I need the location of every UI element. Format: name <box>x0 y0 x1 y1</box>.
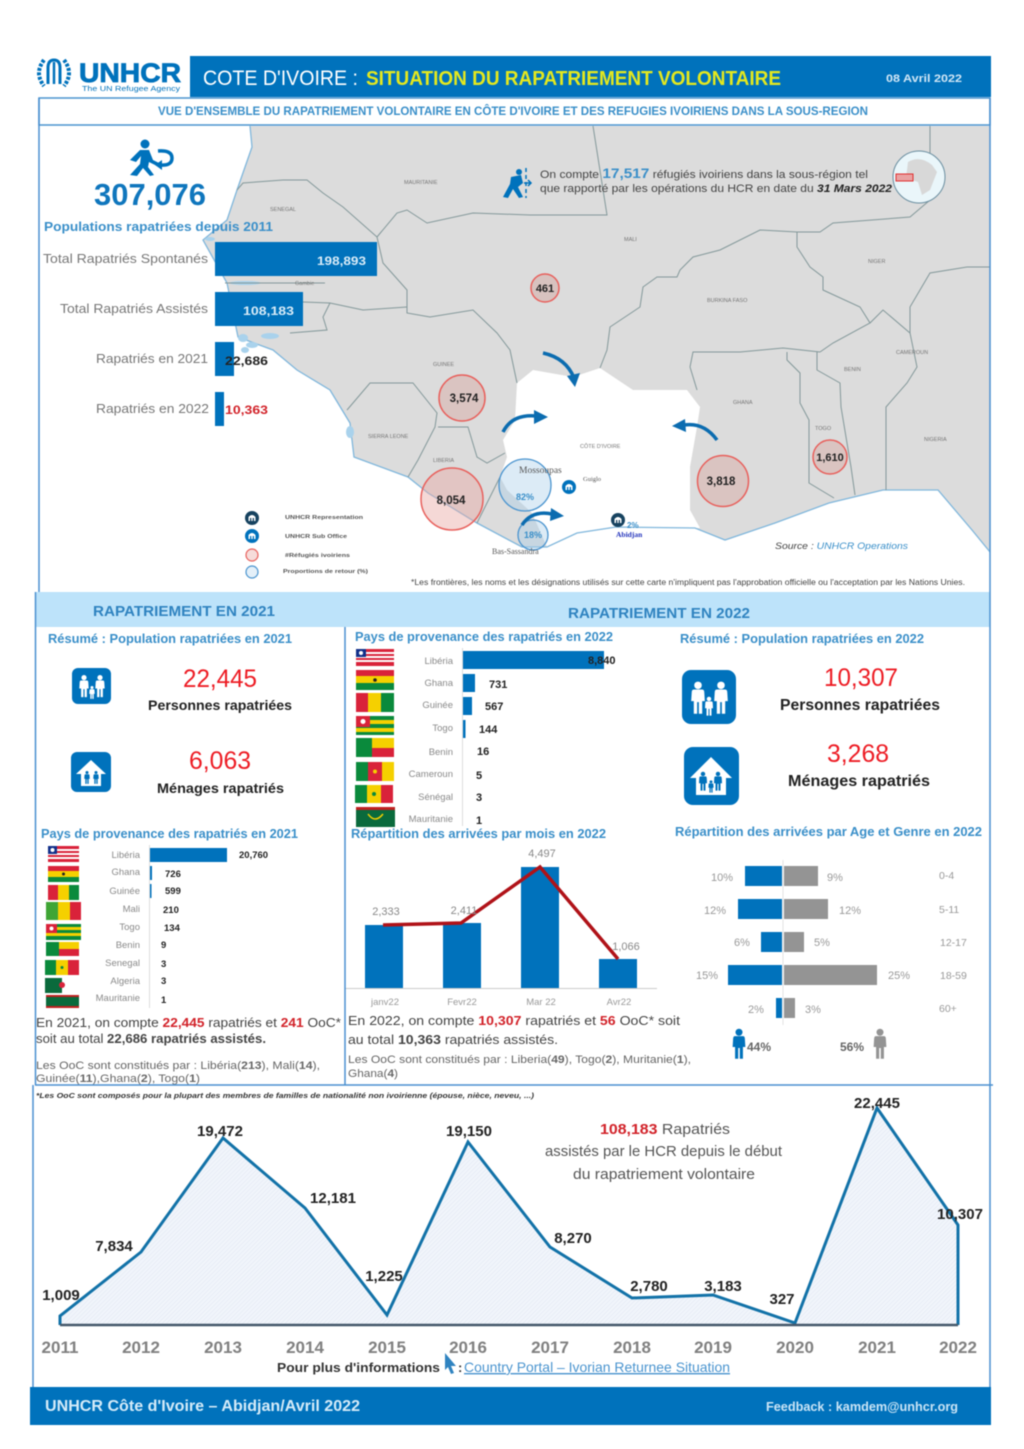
chart: population pyramid: 60+ <box>939 1003 957 1015</box>
heading: 2021: RAPATRIEMENT EN 2021 <box>93 603 275 620</box>
heading: Pays de provenance des rapatriés en 2022 <box>355 630 613 644</box>
chart: population pyramid: 12% <box>704 905 726 917</box>
icon: cursor <box>445 1353 456 1374</box>
text block: summary 2021 <box>36 1015 341 1085</box>
point labels: 19,150 <box>446 1123 492 1140</box>
footer <box>30 1387 991 1425</box>
area and line <box>60 1108 958 1325</box>
icon: locator globe <box>893 151 945 203</box>
panel: summary 2022 <box>680 632 940 805</box>
bar: 2021: 22,686 <box>225 354 268 368</box>
disclaimer: *Les frontières, les noms et les désignations utilisés sur cette carte n'impliquent pas l'approbation officielle ou l'acceptation par les Nations Unies. <box>411 578 965 587</box>
header banner <box>190 56 991 97</box>
flag: Senegal <box>45 960 79 975</box>
more information link: Country Portal – Ivorian Returnee Situation <box>464 1359 730 1375</box>
circle: Ghana 3,818 <box>698 456 748 506</box>
marker: Abidjan representation <box>611 513 625 527</box>
bar chart: 20,760 <box>239 850 268 861</box>
land <box>203 126 990 552</box>
country labels: NIGER <box>868 259 885 265</box>
chart: population pyramid: 5-11 <box>939 904 959 916</box>
logo: UNHCR <box>39 58 181 93</box>
panel: age and gender <box>675 825 982 1059</box>
circle: Mali 461: 461 <box>536 283 554 295</box>
icon: family <box>682 670 736 724</box>
more information link <box>277 1353 730 1375</box>
point labels: 19,472 <box>197 1123 243 1140</box>
point labels: 2,780 <box>630 1278 668 1295</box>
section band <box>36 592 990 627</box>
text block: summary 2021: En 2021, on compte 22,445 rapatriés et 241 OoC* <box>36 1015 341 1030</box>
legend <box>245 511 368 578</box>
country labels: CAMEROUN <box>896 350 928 356</box>
bar chart: 3 <box>161 976 166 987</box>
year axis: 2022 <box>939 1338 977 1357</box>
chart: bars and line: 2,411 <box>451 905 477 917</box>
flag: Togo <box>46 924 81 940</box>
point labels: 10,307 <box>937 1206 983 1223</box>
point labels: 1,225 <box>365 1268 403 1285</box>
bar chart: Algeria <box>110 976 141 987</box>
legend: UNHCR Sub Office <box>285 534 347 540</box>
chart: population pyramid: 3% <box>805 1004 821 1016</box>
icon: UNHCR emblem <box>39 60 69 86</box>
year axis: 2011 <box>42 1338 78 1357</box>
year axis: 2020 <box>776 1338 814 1357</box>
circle: Mali 461 <box>531 274 559 302</box>
icon: person returning <box>130 140 172 176</box>
chart: bars and line: 1,066 <box>612 941 640 953</box>
callout: refugees in the sub-region: On compte 17,517 réfugiés ivoiriens dans la sous-région tel <box>540 165 868 181</box>
heading: Résumé : Population rapatriées en 2022 <box>680 632 924 646</box>
chart: population pyramid: 25% <box>888 970 910 982</box>
text block: summary 2022: En 2022, on compte 10,307 rapatriés et 56 OoC* soit <box>348 1013 680 1028</box>
country labels: MAURITANIE <box>404 180 438 186</box>
chart: population pyramid: 0-4 <box>939 870 954 882</box>
year axis: 2016 <box>449 1338 487 1357</box>
chart: population pyramid: 5% <box>814 937 830 949</box>
total figure: 307,076 <box>94 177 206 212</box>
chart: bars and line: Avr22 <box>607 997 631 1008</box>
coastal inlets <box>205 237 354 438</box>
heading: Pays de provenance des rapatriés en 2021 <box>41 827 298 841</box>
stat: persons: Personnes rapatriées <box>780 697 940 714</box>
stat: persons: 22,445 <box>183 665 257 693</box>
chart: population pyramid: 15% <box>696 970 718 982</box>
text block: summary 2021: Les OoC sont constitués par : Libéria( 213), Mali( 14), <box>36 1060 320 1072</box>
bar chart: Mauritanie <box>409 814 453 825</box>
more information link: : <box>458 1360 462 1375</box>
stat: persons: 10,307 <box>824 664 898 692</box>
bar chart: 726 <box>165 869 181 880</box>
heading: Répartition des arrivées par Age et Genre en 2022 <box>675 825 982 839</box>
country labels: GUINEE <box>433 362 454 368</box>
bar chart: Togo <box>119 922 140 933</box>
Côte d'Ivoire <box>500 368 700 547</box>
flag: Mauritania <box>356 807 395 827</box>
point labels: 7,834 <box>95 1238 133 1255</box>
country labels: BURKINA FASO <box>707 298 748 304</box>
heading: 2022: RAPATRIEMENT EN 2022 <box>568 605 750 622</box>
bar: 2022 <box>96 392 268 426</box>
bar chart: Benin <box>429 747 453 758</box>
country labels: NIGERIA <box>924 437 947 443</box>
bar chart: Senegal <box>105 958 140 969</box>
place names: Guiglo <box>583 476 601 483</box>
place names: 2% <box>627 521 639 530</box>
place names: Mossoupas <box>519 466 562 476</box>
flag: Senegal <box>355 785 393 803</box>
bar chart: Ghana <box>111 867 141 878</box>
bar: spontanés: Total Rapatriés Spontanés <box>43 251 209 266</box>
point labels: 8,270 <box>554 1230 592 1247</box>
bar chart: Guinée <box>422 700 453 711</box>
chart: population pyramid: 2% <box>748 1004 764 1016</box>
callout: assisted returnees: assistés par le HCR depuis le début <box>545 1144 782 1160</box>
circle: Guinée 3,574: 3,574 <box>450 393 479 405</box>
country labels: SENEGAL <box>270 207 296 213</box>
icon: family <box>72 668 111 704</box>
bar: spontanés: 198,893 <box>317 254 366 268</box>
heading: Répartition des arrivées par mois en 2022 <box>351 827 606 841</box>
year axis: 2014 <box>286 1338 324 1357</box>
panel: origin countries 2022 <box>355 630 616 827</box>
place names: Abidjan <box>616 530 643 539</box>
place names <box>492 466 643 556</box>
bar chart: 144 <box>479 724 498 736</box>
callout: assisted returnees: 108,183 Rapatriés <box>600 1121 730 1138</box>
chart: bars and line: 2,333 <box>372 906 400 918</box>
bar chart: Benin <box>116 940 140 951</box>
country labels: CÔTE D'IVOIRE <box>580 443 621 450</box>
flag: Guinea <box>48 885 79 900</box>
flag: Mali <box>46 902 81 920</box>
wordmark: UNHCR <box>79 58 181 88</box>
overview strip: VUE D'ENSEMBLE DU RAPATRIEMENT VOLONTAIRE EN CÔTE D'IVOIRE ET DES REFUGIES IVOIRIENS DANS LA SOUS-REGION <box>158 105 868 118</box>
chart: population pyramid: 12-17 <box>940 937 967 949</box>
bar chart: Libéria <box>111 850 141 861</box>
stat: households: 6,063 <box>189 747 251 775</box>
bar: 2022: 10,363 <box>225 403 268 417</box>
bar chart: 134 <box>164 923 181 934</box>
bar: assistés: 108,183 <box>243 304 294 318</box>
bar chart: 9 <box>161 940 166 951</box>
legend: Proportions de retour (%) <box>283 569 368 575</box>
panel: summary 2021 <box>48 632 292 796</box>
circle: Man 82%: 82% <box>516 492 534 502</box>
year axis: 2018 <box>613 1338 651 1357</box>
flag: Ghana <box>356 670 394 690</box>
bar: 2021: Rapatriés en 2021 <box>96 351 208 366</box>
point labels: 3,183 <box>704 1278 742 1295</box>
bar: 2021 <box>96 342 268 376</box>
bar chart: Ghana <box>424 678 454 689</box>
circle: Togo 1,610: 1,610 <box>816 452 844 464</box>
point labels: 22,445 <box>854 1095 900 1112</box>
country labels: SIERRA LEONE <box>368 434 409 440</box>
panel: map <box>203 126 990 587</box>
arrow: from Libéria <box>522 508 564 525</box>
chart: bars and line: Fevr22 <box>447 997 477 1008</box>
circle: Togo 1,610 <box>813 440 847 474</box>
flag: Ghana <box>48 866 79 882</box>
arrow: from Ghana <box>672 419 717 440</box>
year axis: 2015 <box>368 1338 406 1357</box>
marker: Guiglo office <box>562 480 576 494</box>
bar chart: 3 <box>476 792 482 804</box>
bar chart: Guinée <box>109 886 140 897</box>
gender: female: 56% <box>840 1040 864 1054</box>
text block: summary 2022: Ghana( 4) <box>348 1068 398 1080</box>
country labels <box>270 180 947 464</box>
year axis <box>42 1338 977 1357</box>
chart: population pyramid: 10% <box>711 872 733 884</box>
callout: refugees in the sub-region <box>503 165 892 198</box>
bar chart: 599 <box>165 886 181 897</box>
bar chart: Cameroun <box>409 769 453 780</box>
point labels: 1,009 <box>42 1287 80 1304</box>
chart: population pyramid: 12% <box>839 905 861 917</box>
legend: UNHCR Representation <box>285 515 364 521</box>
country labels: LIBERIA <box>433 458 454 464</box>
arrow: from Guinée <box>503 410 548 432</box>
stat: households: 3,268 <box>827 740 889 768</box>
bar chart: 731 <box>489 679 507 691</box>
point labels <box>42 1095 983 1308</box>
callout: assisted returnees <box>545 1121 782 1183</box>
year axis: 2019 <box>694 1338 732 1357</box>
bar chart <box>96 845 268 1008</box>
date: 08 Avril 2022 <box>886 73 962 85</box>
stat: persons: Personnes rapatriées <box>148 697 292 713</box>
text block: summary 2022: Les OoC sont constitués par : Liberia( 49), Togo( 2), Muritanie( 1), <box>348 1054 691 1066</box>
bar chart: 16 <box>477 746 489 758</box>
flags <box>45 846 81 1008</box>
footer right: Feedback : kamdem@unhcr.org <box>766 1400 958 1414</box>
callout: refugees in the sub-region: que rapporté par les opérations du HCR en date du 31 Mars 2022 <box>540 183 892 195</box>
bar: assistés: Total Rapatriés Assistés <box>60 301 209 316</box>
coastline <box>203 126 990 552</box>
icon: household <box>71 752 111 792</box>
caption: Populations rapatriées depuis 2011 <box>44 219 273 234</box>
flag: Guinea <box>356 693 394 712</box>
text block: summary 2022: au total 10,363 rapatriés assistés. <box>348 1032 558 1047</box>
title: COTE D'IVOIRE : <box>203 66 358 90</box>
year axis: 2013 <box>204 1338 242 1357</box>
icon: refugee crossing <box>503 168 531 198</box>
country labels: Gambie <box>295 281 314 287</box>
bar chart: 5 <box>476 770 482 782</box>
text block: summary 2021: soit au total 22,686 rapatriés assistés. <box>36 1031 266 1046</box>
chart: returnees per year <box>42 1095 983 1357</box>
circle: Libéria 8,054 <box>421 468 483 530</box>
flag: Cameroon <box>356 762 394 781</box>
flags <box>355 649 395 827</box>
flag: Mauritania <box>46 995 79 1008</box>
icon: household <box>684 747 739 805</box>
year axis: 2021 <box>858 1338 896 1357</box>
stat: persons <box>780 664 940 714</box>
bar chart: Togo <box>432 723 453 734</box>
subtitle: SITUATION DU RAPATRIEMENT VOLONTAIRE <box>366 68 781 90</box>
chart: population pyramid: 9% <box>827 872 843 884</box>
bar chart: Mauritanie <box>96 993 140 1004</box>
point labels: 12,181 <box>310 1190 356 1207</box>
circle: San Pedro 18%: 18% <box>524 530 542 540</box>
callout: assisted returnees: du rapatriement volontaire <box>573 1167 755 1183</box>
circle: Ghana 3,818: 3,818 <box>707 476 736 488</box>
place names: Bas-Sassandra <box>492 547 539 556</box>
chart: bars and line: janv22 <box>370 997 399 1008</box>
bar chart: 1 <box>161 995 167 1006</box>
circle: Guinée 3,574 <box>439 375 485 421</box>
arrow: from Mali <box>543 353 580 387</box>
gender: male: 44% <box>747 1040 771 1054</box>
flag: Algeria <box>45 978 65 993</box>
year axis: 2012 <box>122 1338 160 1357</box>
source: Source : UNHCR Operations <box>775 541 908 552</box>
chart: population pyramid: 18-59 <box>940 970 967 982</box>
borders <box>225 126 990 523</box>
bar chart: 567 <box>485 701 503 713</box>
circle: San Pedro 18% <box>518 520 548 550</box>
country labels: GHANA <box>733 400 753 406</box>
footnote: *Les OoC sont composés pour la plupart des membres de familles de nationalité non ivoirienne (épouse, nièce, neveu, ...) <box>36 1091 535 1100</box>
more information link: Pour plus d'informations <box>277 1360 440 1375</box>
flag: Togo <box>356 716 394 735</box>
gender: female <box>840 1029 886 1059</box>
country labels: BENIN <box>844 367 861 373</box>
stat: households <box>157 747 284 796</box>
bar chart <box>409 648 616 827</box>
legend: #Réfugiés ivoiriens <box>285 553 350 559</box>
panel: total returnees <box>43 140 377 426</box>
chart: bars and line: Mar 22 <box>526 997 556 1008</box>
bar: 2022: Rapatriés en 2022 <box>96 401 209 416</box>
text block: summary 2021: Guinée( 11),Ghana( 2), Togo( 1) <box>36 1073 200 1085</box>
flag: Liberia <box>356 649 394 666</box>
circle: Libéria 8,054: 8,054 <box>437 495 466 507</box>
flag: Liberia <box>48 846 79 862</box>
stat: households <box>788 740 930 790</box>
panel: arrivals by month <box>345 827 657 1008</box>
bar: assistés <box>60 292 303 326</box>
bar chart: Libéria <box>424 656 454 667</box>
chart: bars and line: 4,497 <box>528 848 556 860</box>
stat: households: Ménages rapatriés <box>788 773 930 790</box>
bar chart: 8,840 <box>588 655 616 667</box>
flag: Benin <box>356 738 394 757</box>
bar chart: Mali <box>123 904 140 915</box>
country labels: MALI <box>624 237 637 243</box>
footer left: UNHCR Côte d'Ivoire – Abidjan/Avril 2022 <box>45 1398 360 1415</box>
flag: Benin <box>46 942 79 956</box>
gender: male <box>733 1029 771 1059</box>
panel: origin countries 2021 <box>41 827 298 1008</box>
chart: population pyramid: 6% <box>734 937 750 949</box>
chart: population pyramid <box>696 860 967 1025</box>
chart: bars and line <box>345 848 657 1008</box>
bar: spontanés <box>43 242 377 276</box>
text block: summary 2022 <box>348 1013 691 1080</box>
overview strip <box>39 98 990 125</box>
stat: households: Ménages rapatriés <box>157 780 284 796</box>
bar chart: Sénégal <box>418 792 453 803</box>
country labels: TOGO <box>815 426 832 432</box>
tagline: The UN Refugee Agency <box>82 84 180 93</box>
year axis: 2017 <box>531 1338 569 1357</box>
point labels: 327 <box>769 1291 795 1308</box>
stat: persons <box>148 665 292 713</box>
heading: Résumé : Population rapatriées en 2021 <box>48 632 292 646</box>
bar chart: 1 <box>476 815 482 827</box>
bar chart: 3 <box>161 959 166 970</box>
circle: Man 82% <box>499 459 551 511</box>
bar chart: 210 <box>163 905 179 916</box>
